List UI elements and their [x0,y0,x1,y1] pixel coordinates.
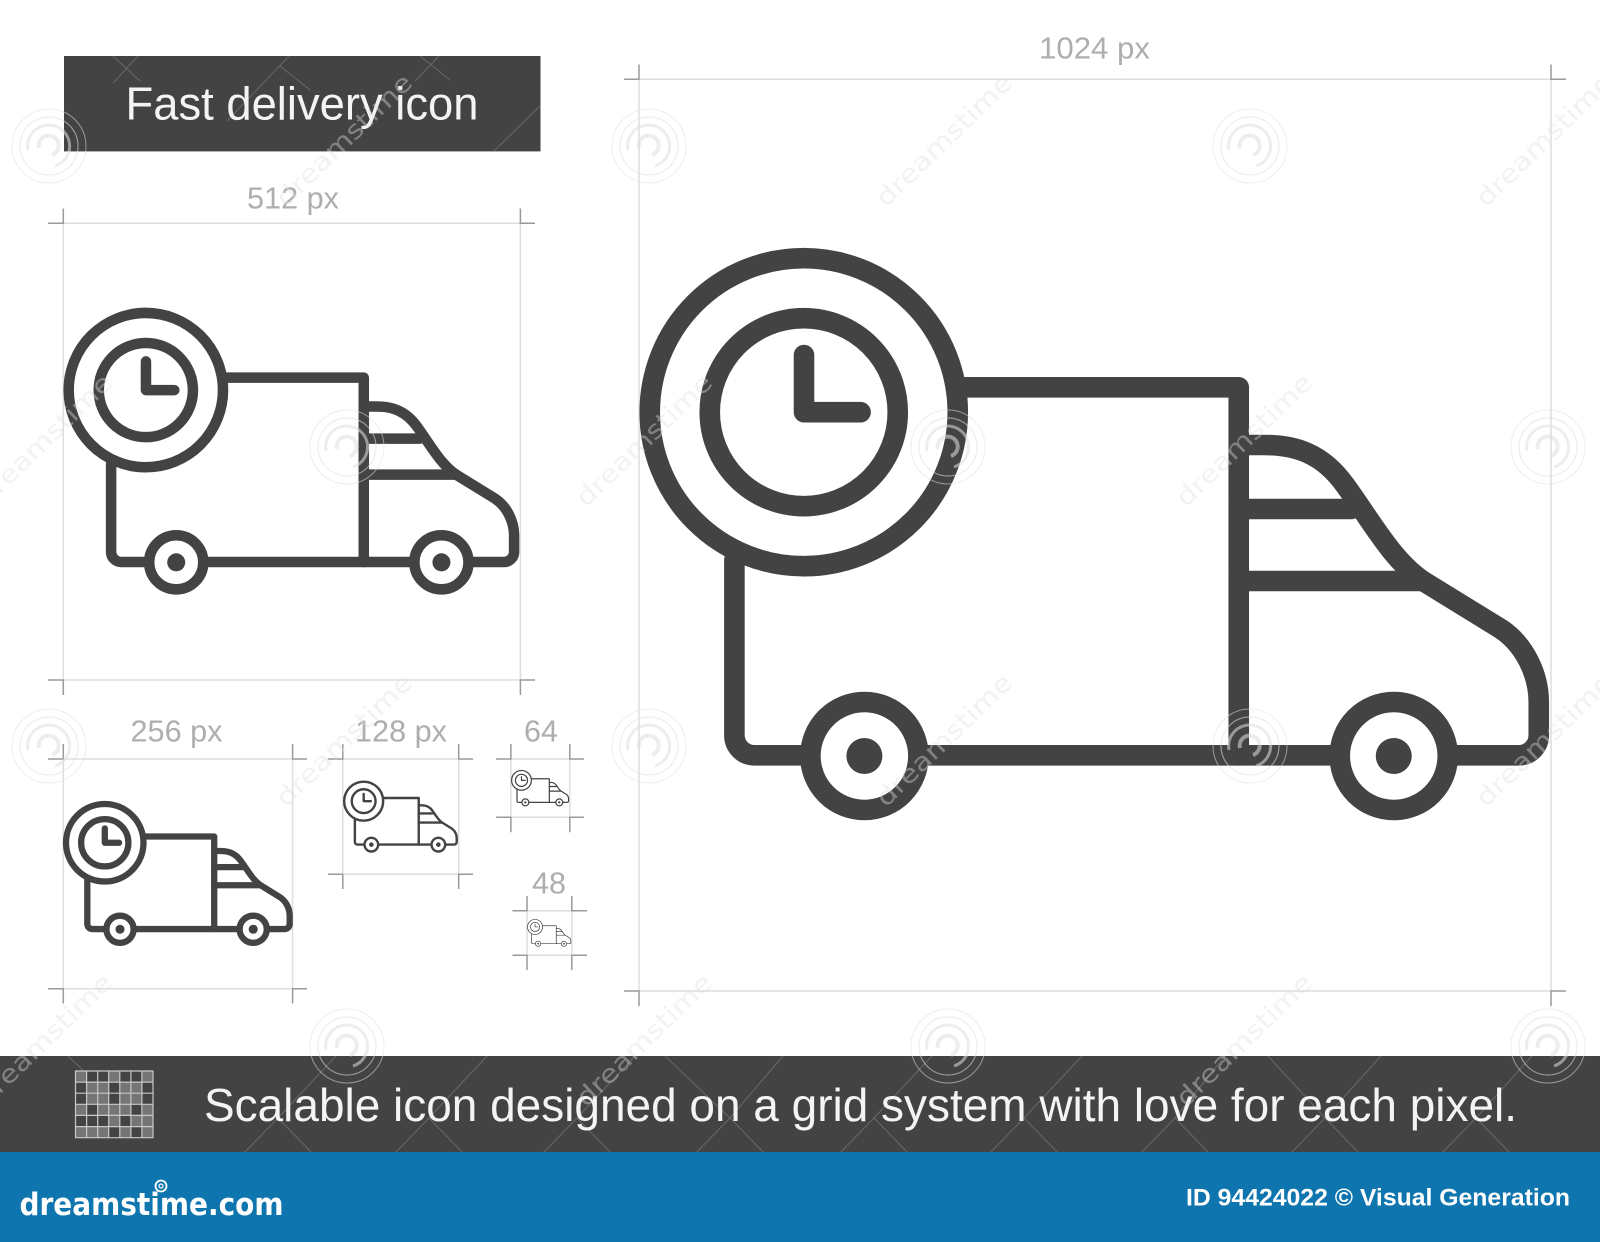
size label: 512 px: 512 px [247,180,339,216]
icon: truck 1024 px [650,258,1539,810]
size label: 48: 48 [532,865,566,900]
watermark overlay: dreamstime [570,368,718,512]
panel: 512 px icon [48,180,535,695]
size label: 64: 64 [524,714,558,749]
icon: truck 512 px [69,313,514,589]
panel: 1024 px icon [624,30,1566,1006]
size label: 1024 px: 1024 px [1039,30,1150,65]
footer bar: grid system [0,1056,1600,1152]
frame: 128 px [328,744,473,889]
icon: truck 256 px [66,804,290,943]
size label: 128 px: 128 px [355,714,447,749]
icon: truck 48 px [528,919,571,946]
frame: 1024 px [624,64,1566,1006]
footer caption: Scalable icon designed on a grid system with love for each pixel. [204,1079,1517,1131]
watermark overlay: dreamstime [1170,368,1318,512]
watermark overlay: dreamstime [1470,68,1600,212]
panel: 256 px icon [48,714,307,1004]
icon: truck 128 px [344,782,457,852]
frame: 512 px [48,208,535,695]
credit bar [0,1152,1600,1242]
title banner [64,56,540,151]
watermark overlay: dreamstime [870,68,1018,212]
watermark overlay: dreamstime [870,668,1018,812]
watermark overlay: dreamstime [1470,668,1600,812]
panel: 128 px icon [328,714,473,889]
icon: truck 64 px [512,770,569,806]
title banner: Fast delivery icon [126,78,478,130]
image credit: ID 94424022 © Visual Generation [1186,1185,1570,1212]
watermark overlay: dreamstime [570,968,718,1112]
panel: 48 px icon [512,865,587,970]
frame: 64 px [496,744,584,832]
watermark overlay: dreamstime [1170,968,1318,1112]
frame: 48 px [512,896,587,970]
frame: 256 px [48,744,307,1004]
size label: 256 px: 256 px [130,714,223,749]
icon: pixel grid [76,1071,153,1138]
watermark overlay: dreamstime [270,668,418,812]
panel: 64 px icon [496,714,584,832]
watermark overlay: dreamstime [270,68,418,212]
logo: dreamstime.com: dreamstime.com [20,1187,284,1223]
